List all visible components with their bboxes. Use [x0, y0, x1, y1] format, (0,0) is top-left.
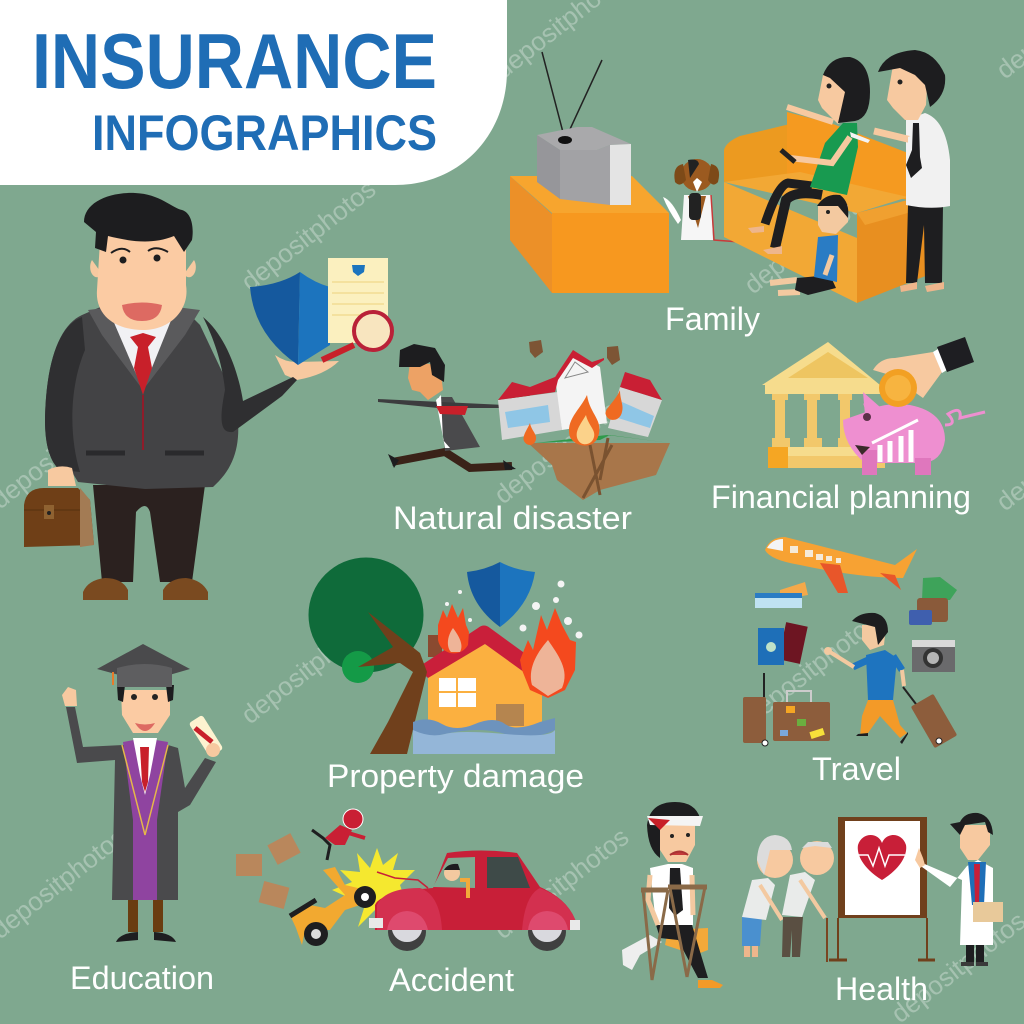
gown with arms	[66, 707, 216, 900]
illustration: injured man	[622, 802, 723, 988]
sash	[123, 740, 168, 900]
agent sleeves	[45, 317, 297, 472]
policy document	[328, 258, 388, 343]
piggy bank	[843, 392, 985, 475]
orange bag	[665, 928, 708, 955]
house roofs	[498, 350, 604, 400]
leg cast	[622, 935, 662, 970]
label: travel: Travel	[812, 751, 901, 787]
ground	[528, 443, 670, 500]
smoke	[445, 580, 582, 638]
head	[660, 825, 695, 862]
agent lapels	[88, 306, 200, 390]
illustration: graduate (education)	[62, 644, 223, 942]
luggage	[743, 673, 830, 746]
man jacket	[438, 397, 480, 451]
raised hand	[62, 687, 77, 706]
fire big	[520, 608, 576, 698]
text: depositphotos	[738, 606, 884, 730]
camera	[912, 640, 955, 672]
man shirt	[436, 395, 450, 448]
text: depositphotos	[235, 173, 381, 297]
label: family: Family	[665, 301, 760, 337]
man standing	[850, 50, 950, 292]
tickets	[755, 582, 808, 608]
house center	[555, 352, 607, 430]
title: insurance: INSURANCE	[32, 17, 437, 105]
man briefcase	[508, 392, 530, 422]
agent mouth	[122, 302, 162, 321]
tree trunk	[358, 612, 427, 754]
heart board	[829, 817, 935, 960]
illustration: health	[742, 813, 1003, 966]
shirt and tie	[133, 738, 157, 795]
boxes	[236, 833, 301, 909]
illustration: family	[510, 50, 950, 303]
legs and shoes	[128, 898, 163, 932]
flames	[569, 395, 599, 446]
agent hand holding	[275, 355, 339, 380]
agent shoes	[83, 578, 208, 600]
title panel	[0, 0, 507, 185]
dog	[663, 159, 740, 242]
tv stand	[510, 176, 669, 293]
shield, policy and magnifier icon	[250, 258, 392, 365]
window	[439, 678, 476, 707]
pants	[656, 925, 708, 978]
man head	[408, 362, 443, 400]
illustration: property damage	[308, 558, 582, 754]
traveller	[824, 613, 957, 748]
tv	[537, 52, 631, 205]
head	[121, 690, 170, 733]
elderly woman	[742, 835, 793, 957]
man tie	[436, 406, 468, 415]
coin and hand	[873, 337, 974, 407]
shirt	[650, 864, 693, 925]
woman	[748, 57, 870, 254]
agent eyes	[111, 248, 168, 264]
agent head	[97, 225, 187, 330]
passports	[758, 622, 808, 665]
small foliage	[342, 651, 374, 683]
elderly man	[782, 841, 834, 962]
wallet and money	[909, 577, 957, 625]
label: education: Education	[70, 960, 214, 996]
illustration: travel	[743, 537, 957, 748]
house left wing	[498, 392, 562, 440]
shield	[467, 562, 535, 627]
house right wing	[608, 387, 662, 437]
text: depositphotos	[488, 386, 634, 510]
crutches	[641, 887, 707, 980]
running man	[378, 344, 530, 470]
insurance agent figure	[24, 193, 339, 600]
agent shirt and tie	[112, 318, 172, 390]
illustration: financial planning	[762, 337, 985, 475]
falling rocks	[529, 340, 620, 365]
illustration: accident	[236, 809, 580, 951]
text: depositphotos	[235, 606, 381, 730]
man legs	[392, 452, 512, 468]
agent hair	[84, 193, 193, 252]
man hair	[399, 344, 445, 382]
roof	[417, 626, 545, 678]
agent ears	[90, 260, 196, 277]
thrown rider	[312, 809, 365, 860]
agent jacket	[45, 305, 238, 489]
tie	[669, 868, 683, 916]
tree crown	[308, 558, 424, 672]
label: accident: Accident	[389, 962, 514, 998]
water	[413, 718, 555, 754]
bank	[762, 342, 885, 468]
house windows	[505, 402, 654, 428]
text: depositphotos	[738, 176, 884, 300]
text: depositphotos	[488, 821, 634, 945]
car	[369, 850, 580, 951]
scooter	[290, 867, 376, 946]
illustration: natural disaster	[378, 340, 670, 500]
label: health: Health	[835, 971, 928, 1007]
shield	[250, 272, 300, 365]
diploma	[189, 715, 223, 757]
door	[496, 704, 524, 726]
man arms	[378, 399, 505, 408]
airplane	[765, 537, 917, 593]
house body	[428, 643, 542, 730]
boy	[770, 195, 848, 295]
agent briefcase	[24, 466, 94, 547]
label: property damage: Property damage	[327, 758, 584, 794]
chimney	[428, 635, 442, 657]
cap	[97, 644, 190, 682]
agent legs	[93, 485, 205, 582]
label: financial planning: Financial planning	[711, 479, 971, 515]
label: natural disaster: Natural disaster	[393, 500, 632, 536]
arms	[648, 875, 693, 925]
doctor	[915, 813, 1003, 966]
foot	[698, 980, 723, 988]
crash star	[332, 848, 415, 927]
sofa	[724, 112, 936, 303]
fire small	[438, 604, 469, 653]
title: infographics: INFOGRAPHICS	[92, 105, 437, 161]
magnifier	[322, 345, 354, 360]
